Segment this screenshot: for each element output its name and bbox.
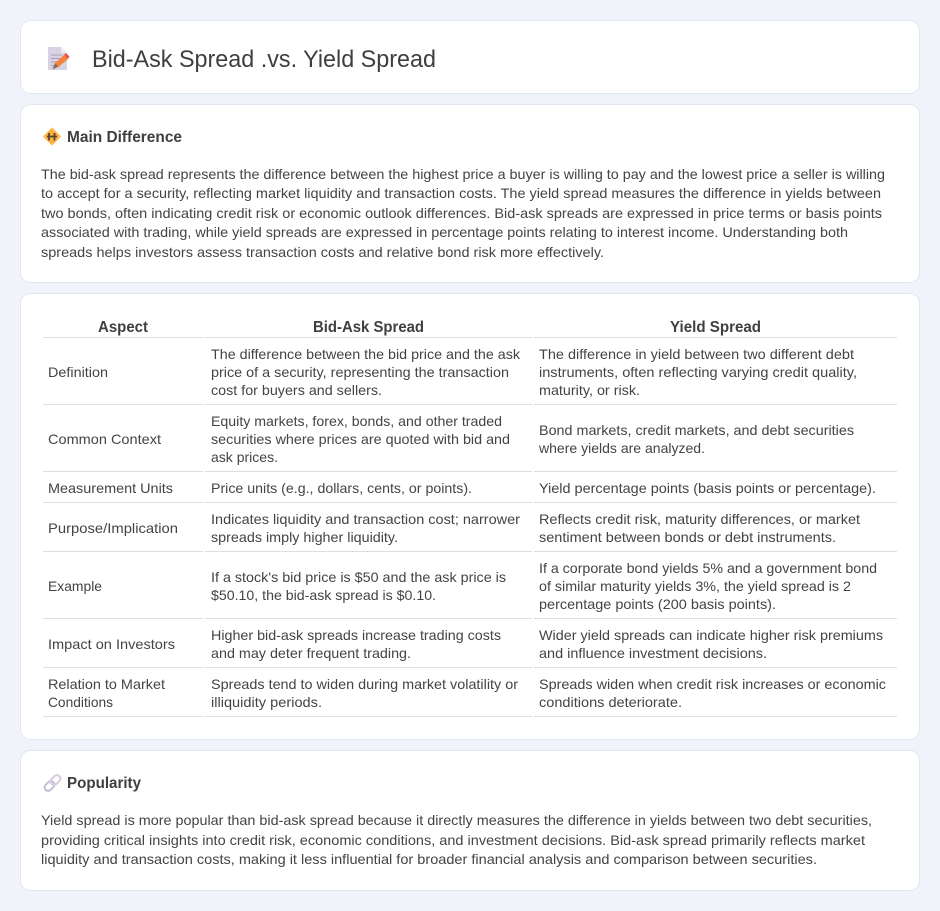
- row: common context: where yields are analyzed.: [538, 440, 705, 456]
- row: definition: price of a security, representing the transaction: [211, 364, 509, 380]
- row: example: If a corporate bond yields 5% and a government bond: [539, 560, 877, 576]
- table header: Bid-Ask Spread: [313, 319, 424, 336]
- row: definition: [48, 346, 857, 398]
- row: relation to market conditions: Spreads tend to widen during market volatility or: [211, 676, 518, 692]
- row: definition: maturity, or risk.: [539, 382, 640, 398]
- text block: popularity body: liquidity and transaction costs, making it less influential for broader financial analysis and comparison between securities.: [41, 851, 817, 867]
- row: definition: instruments, often reflecting varying credit quality,: [539, 364, 857, 380]
- row: example: [48, 560, 877, 612]
- row: purpose/implication: sentiment between bonds or debt instruments.: [539, 529, 836, 545]
- row: impact on investors: Higher bid-ask spreads increase trading costs: [211, 627, 501, 643]
- row: impact on investors: and may deter frequent trading.: [211, 645, 411, 661]
- row: common context: securities where prices are quoted with bid and: [211, 431, 510, 447]
- row: purpose/implication: [48, 511, 860, 545]
- text block: main difference body: two bonds, often indicating credit risk or economic outlook differences. Bid-ask spreads are expressed in price terms or basis points: [41, 205, 882, 221]
- row: measurement units: Measurement Units: [48, 480, 173, 496]
- row: relation to market conditions: Spreads widen when credit risk increases or economic: [539, 676, 886, 692]
- row: measurement units: Price units (e.g., dollars, cents, or points).: [211, 480, 472, 496]
- row: relation to market conditions: Relation to Market: [48, 676, 165, 692]
- row: example: of similar maturity yields 3%, the yield spread is 2: [539, 578, 851, 594]
- row: definition: The difference in yield between two different debt: [539, 346, 854, 362]
- row: measurement units: [48, 480, 876, 496]
- text block: main difference body: [41, 166, 885, 260]
- row: relation to market conditions: [48, 676, 886, 710]
- text block: popularity body: [41, 812, 872, 867]
- row: example: Example: [48, 578, 102, 594]
- heading: main difference: Main Difference: [67, 129, 182, 146]
- row: definition: Definition: [48, 364, 108, 380]
- table header: [98, 319, 761, 336]
- icon: chain link: [43, 774, 62, 792]
- text block: main difference body: to accept for a security, reflecting market liquidity and transaction costs. The yield spread measures the difference in yields between: [41, 185, 881, 201]
- icon: warning diamond: [44, 128, 60, 145]
- row: purpose/implication: spreads imply higher liquidity.: [211, 529, 398, 545]
- row: common context: [48, 413, 854, 465]
- row: definition: cost for buyers and sellers.: [211, 382, 382, 398]
- panel: main difference: [20, 104, 920, 282]
- row: purpose/implication: Purpose/Implication: [48, 520, 178, 536]
- row: purpose/implication: Indicates liquidity and transaction cost; narrower: [211, 511, 520, 527]
- table header: Aspect: [98, 319, 149, 336]
- row: common context: ask prices.: [211, 449, 278, 465]
- row: common context: Common Context: [48, 431, 161, 447]
- text block: main difference body: spreads helps investors assess transaction costs and relative bond risk more effectively.: [41, 244, 604, 260]
- row: impact on investors: [48, 627, 883, 661]
- text block: main difference body: The bid-ask spread represents the difference between the highest price a buyer is willing to pay and the lowest price a seller is willing: [41, 166, 885, 182]
- text block: main difference body: associated with trading, while yield spreads are expressed in percentage points relating to interest income. Understanding both: [41, 224, 848, 240]
- row: purpose/implication: Reflects credit risk, maturity differences, or market: [539, 511, 860, 527]
- row: example: $50.10, the bid-ask spread is $0.10.: [211, 587, 436, 603]
- row: impact on investors: Wider yield spreads can indicate higher risk premiums: [539, 627, 883, 643]
- row: impact on investors: and influence investment decisions.: [539, 645, 767, 661]
- heading: popularity: Popularity: [67, 775, 141, 792]
- row: common context: Equity markets, forex, bonds, and other traded: [211, 413, 502, 429]
- row: definition: The difference between the bid price and the ask: [211, 346, 521, 362]
- row: relation to market conditions: illiquidity periods.: [211, 694, 322, 710]
- panel: title: [20, 20, 920, 94]
- table header: Yield Spread: [670, 319, 761, 336]
- row: relation to market conditions: Conditions: [48, 694, 113, 710]
- row: common context: Bond markets, credit markets, and debt securities: [539, 422, 854, 438]
- text block: popularity body: Yield spread is more popular than bid-ask spread because it directly measures the difference in yields between two debt securities,: [41, 812, 872, 828]
- row: relation to market conditions: conditions deteriorate.: [539, 694, 682, 710]
- row: impact on investors: Impact on Investors: [48, 636, 175, 652]
- row: example: If a stock's bid price is $50 and the ask price is: [211, 569, 506, 585]
- icon: memo with pencil: [48, 47, 70, 70]
- panel: popularity: [20, 750, 920, 890]
- panel: comparison table: [20, 294, 920, 740]
- row: measurement units: Yield percentage points (basis points or percentage).: [539, 480, 876, 496]
- heading: page title: Bid-Ask Spread .vs. Yield Spread: [92, 46, 436, 73]
- text block: popularity body: providing critical insights into credit risk, economic conditions, and investment decisions. Bid-ask spread primarily reflects market: [41, 832, 865, 848]
- row: example: percentage points (200 basis points).: [539, 596, 776, 612]
